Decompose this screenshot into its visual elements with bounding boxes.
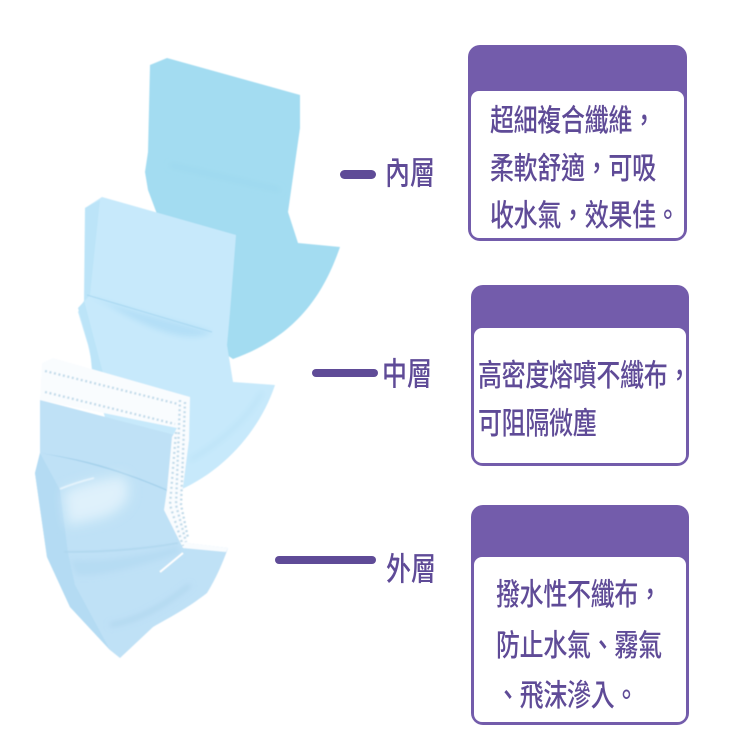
mask: outer layer — [35, 358, 228, 658]
connector: outer layer — [275, 556, 376, 564]
text: inner layer description: 柔軟舒適，可吸 — [490, 151, 656, 186]
text: middle layer description: 可阻隔微塵 — [478, 406, 596, 441]
label: middle layer: 中層 — [382, 357, 432, 393]
text: outer layer description — [496, 577, 662, 713]
illustration: three mask layers — [35, 58, 340, 658]
connector: inner layer — [340, 170, 376, 179]
text: middle layer description — [478, 358, 691, 441]
label: outer layer: 外層 — [386, 552, 436, 588]
label: inner layer: 內層 — [385, 156, 435, 192]
text: inner layer description — [490, 103, 679, 233]
text: outer layer description: 防止水氣、霧氣 — [496, 628, 662, 663]
panel: inner layer description — [468, 45, 687, 241]
mask: middle layer — [78, 197, 275, 490]
text: inner layer description: 超細複合纖維， — [490, 103, 656, 138]
connector: middle layer — [312, 369, 378, 377]
text: inner layer description: 收水氣，效果佳。 — [490, 198, 679, 233]
mask: inner layer — [145, 58, 340, 359]
panel: middle layer description — [471, 285, 691, 466]
mask: white nose strip — [40, 358, 228, 552]
text: middle layer description: 高密度熔噴不纖布， — [478, 358, 691, 393]
text: outer layer description: 、飛沫滲入。 — [496, 678, 638, 713]
panel: outer layer description — [471, 505, 689, 725]
text: outer layer description: 撥水性不纖布， — [496, 577, 662, 612]
